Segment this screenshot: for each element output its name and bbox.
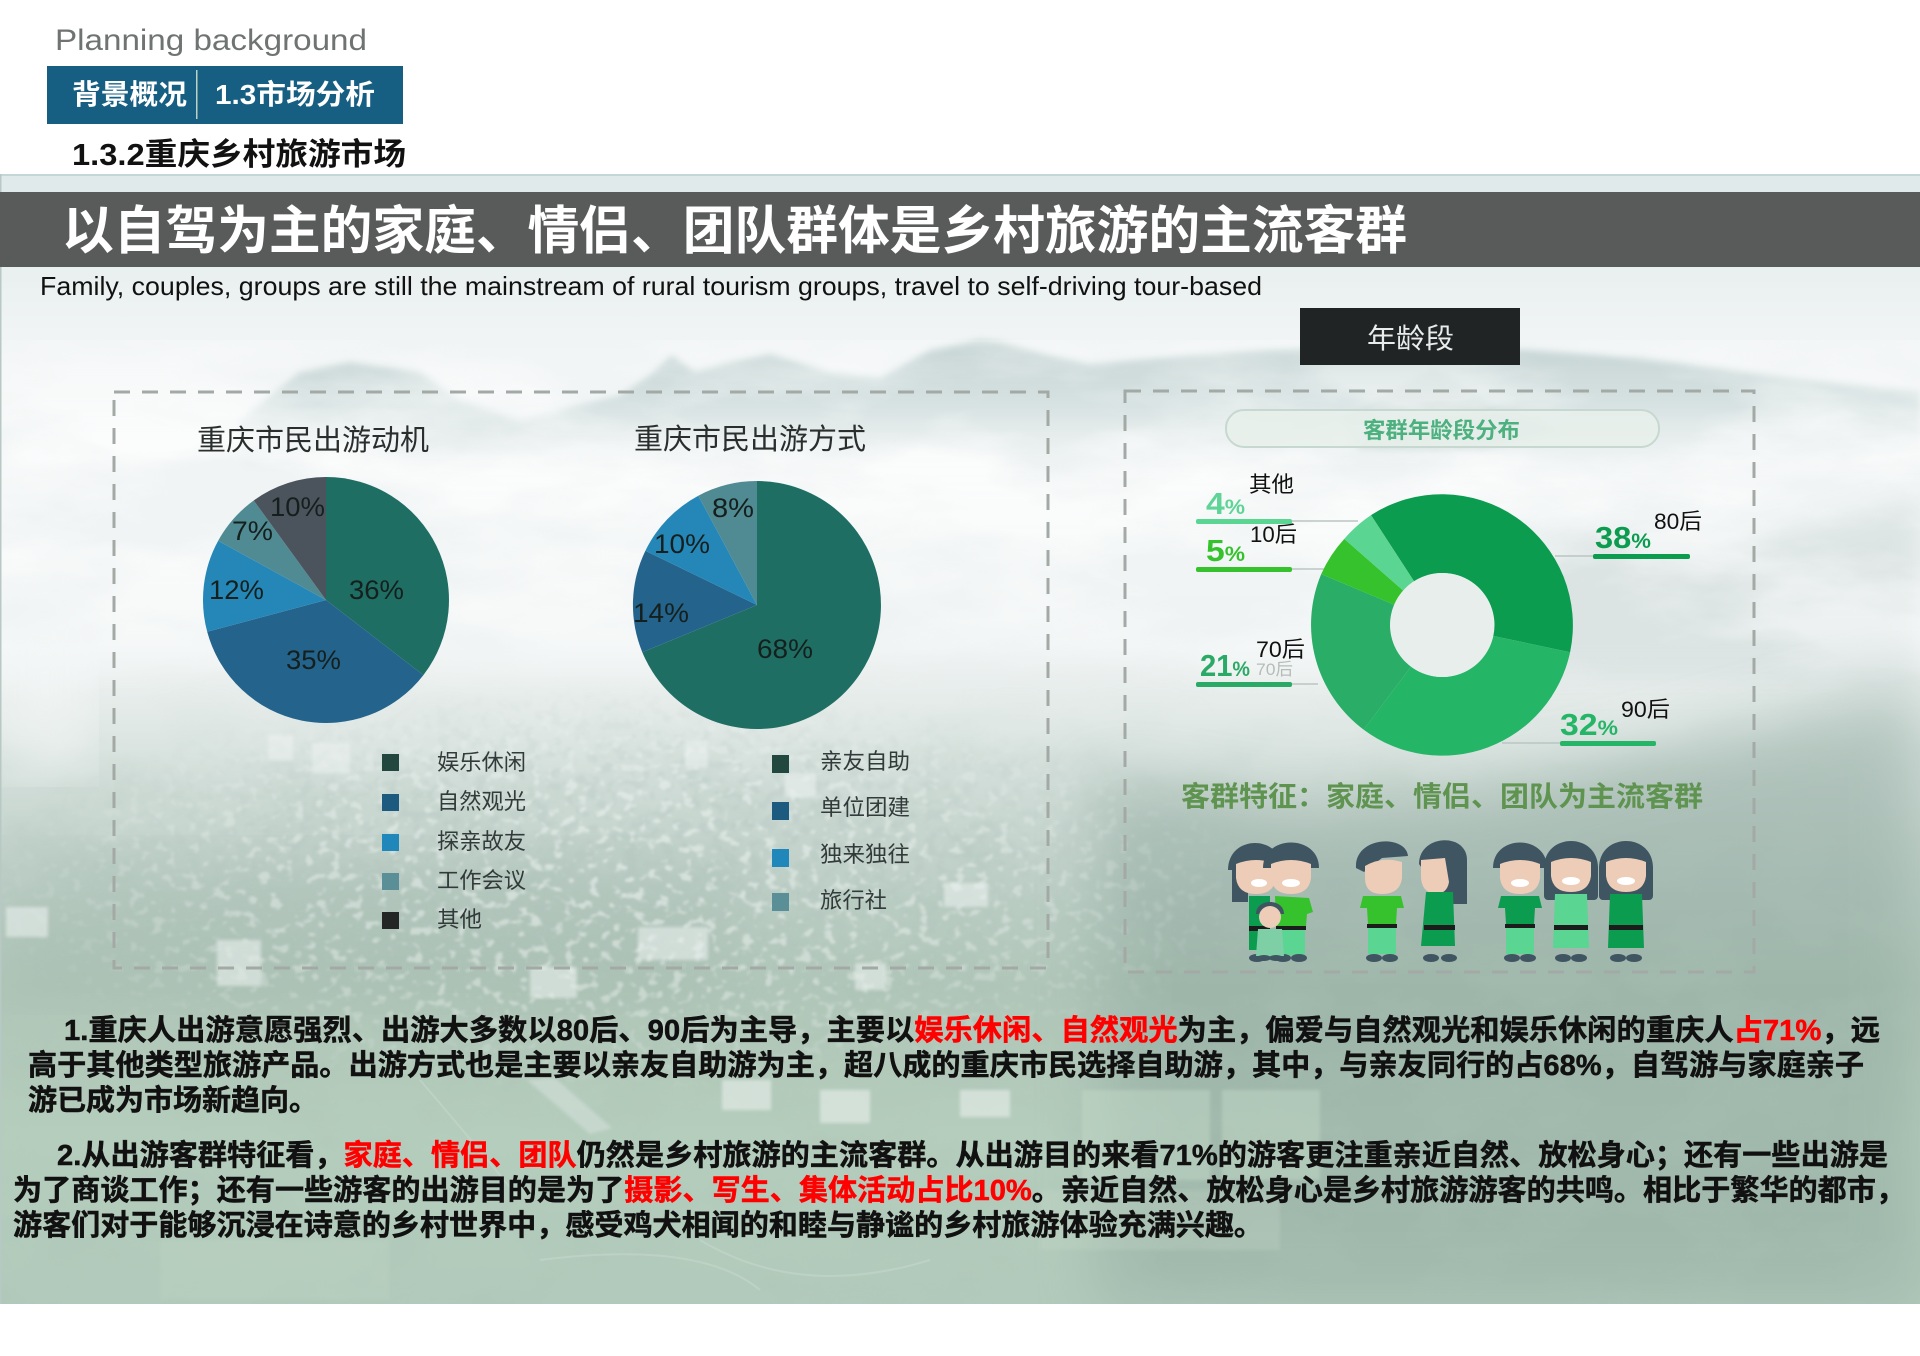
label: 80s 38%: 80后 xyxy=(1654,509,1702,534)
title banner xyxy=(0,192,1920,267)
sub-section heading: 1.3.2重庆乡村旅游市场 xyxy=(72,137,406,172)
legend: travel motivation: 其他 xyxy=(437,907,482,932)
panel: pie charts xyxy=(114,392,1048,968)
pie chart: travel mode xyxy=(633,481,881,729)
text block: paragraph 2: 2.从出游客群特征看，家庭、情侣、团队仍然是乡村旅游的主流客群。从出游目的来看71%的游客更注重亲近自然、放松身心；还有一些出游是 xyxy=(57,1139,1888,1172)
label: other 4%: 其他 xyxy=(1249,472,1294,497)
pie chart: travel motivation: 7% xyxy=(232,516,273,546)
icon: couple xyxy=(1356,840,1467,962)
legend: travel motivation: 探亲故友 xyxy=(437,829,526,854)
text block: paragraph 1 xyxy=(28,1014,1880,1117)
age tab xyxy=(1300,308,1520,365)
icon: family group xyxy=(1228,842,1319,962)
pie chart: travel motivation: 10% xyxy=(270,492,325,522)
label: 70s 21% xyxy=(1196,637,1305,687)
section tab: 背景概况 1.3市场分析: 背景概况 xyxy=(72,79,187,110)
pie chart: travel motivation: 12% xyxy=(209,575,264,605)
label: 80s 38% xyxy=(1593,509,1702,559)
pie chart: travel motivation: 35% xyxy=(286,645,341,675)
label: other 4%: 4% xyxy=(1206,486,1245,521)
legend: travel motivation xyxy=(382,750,526,932)
pie chart: travel mode: 8% xyxy=(712,493,754,523)
legend: travel motivation: 工作会议 xyxy=(437,868,526,893)
legend: travel mode: 独来独往 xyxy=(820,842,910,867)
pie chart: travel mode: 68% xyxy=(757,634,813,664)
label: 10s 5%: 5% xyxy=(1206,533,1245,568)
label: 70s 21%: 70后 xyxy=(1256,637,1305,662)
legend: travel mode: 旅行社 xyxy=(820,888,887,913)
panel: age distribution xyxy=(1125,391,1754,972)
donut chart: age groups xyxy=(1311,494,1573,756)
label: 70s 21%: 21% xyxy=(1200,648,1250,683)
label: other 4% xyxy=(1196,472,1294,524)
section tab: 背景概况 1.3市场分析 xyxy=(47,66,403,124)
section label: Planning background: Planning background xyxy=(55,24,367,57)
legend: travel mode: 亲友自助 xyxy=(820,749,910,774)
pie chart: travel mode: 14% xyxy=(633,598,689,628)
icon: friend group xyxy=(1493,841,1653,962)
age tab: 年龄段 xyxy=(1367,323,1454,354)
english subtitle: Family, couples, groups are still the mainstream of rural tourism groups, travel to self-driving tour-based xyxy=(40,271,1262,301)
heading: travel mode pie: 重庆市民出游方式 xyxy=(634,423,866,456)
pie chart: travel motivation xyxy=(203,477,449,723)
pie chart: travel motivation: 36% xyxy=(349,575,404,605)
pill heading xyxy=(1226,410,1659,447)
pill heading: 客群年龄段分布 xyxy=(1363,418,1520,443)
label: 90s 32%: 32% xyxy=(1560,707,1618,742)
text block: paragraph 1: 游已成为市场新趋向。 xyxy=(28,1084,318,1117)
text block: paragraph 1: 1.重庆人出游意愿强烈、出游大多数以80后、90后为主导，主要以 娱乐休闲、自然观光为主，偏爱与自然观光和娱乐休闲的重庆人占71%，远 xyxy=(64,1014,1880,1047)
label: 10s 5%: 10后 xyxy=(1250,522,1297,547)
section tab: 背景概况 1.3市场分析: 1.3市场分析 xyxy=(215,79,375,110)
label: 90s 32% xyxy=(1560,697,1670,746)
leader lines xyxy=(1292,521,1593,743)
caption: customer traits: 客群特征：家庭、情侣、团队为主流客群 xyxy=(1181,781,1703,812)
heading: motivation pie: 重庆市民出游动机 xyxy=(197,424,429,457)
text block: paragraph 2: 为了商谈工作；还有一些游客的出游目的是为了摄影、写生、集体活动占比10%。亲近自然、放松身心是乡村旅游游客的共鸣。相比于繁华的都市， xyxy=(13,1174,1905,1207)
label: 70s 21%: 70后 xyxy=(1256,660,1293,679)
label: 90s 32%: 90后 xyxy=(1621,697,1670,722)
label: 80s 38%: 38% xyxy=(1595,520,1651,555)
text block: paragraph 2: 游客们对于能够沉浸在诗意的乡村世界中，感受鸡犬相闻的和睦与静谧的乡村旅游体验充满兴趣。 xyxy=(13,1209,1263,1242)
legend: travel mode: 单位团建 xyxy=(820,795,910,820)
label: 10s 5% xyxy=(1196,522,1297,572)
legend: travel motivation: 娱乐休闲 xyxy=(437,750,526,775)
title banner: 以自驾为主的家庭、情侣、团队群体是乡村旅游的主流客群 xyxy=(62,203,1407,261)
pie chart: travel mode: 10% xyxy=(654,529,710,559)
legend: travel motivation: 自然观光 xyxy=(437,789,526,814)
text block: paragraph 1: 高于其他类型旅游产品。出游方式也是主要以亲友自助游为主，超八成的重庆市民选择自助游，其中，与亲友同行的占68%，自驾游与家庭亲子 xyxy=(28,1049,1864,1082)
legend: travel mode xyxy=(772,749,910,913)
text block: paragraph 2 xyxy=(13,1139,1905,1242)
